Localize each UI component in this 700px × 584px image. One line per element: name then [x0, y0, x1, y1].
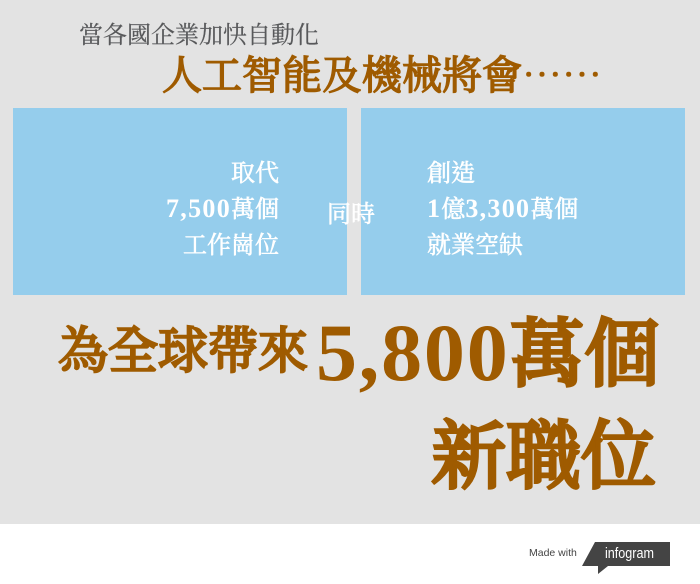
heading: 人工智能及機械將會…… — [162, 44, 602, 101]
intro text: 當各國企業加快自動化 — [79, 15, 319, 50]
footer: made with infogram — [529, 542, 670, 574]
text: at the same time: 同時 — [327, 194, 375, 229]
headline: 58 million: 5,800萬個 — [316, 295, 660, 402]
logo: infogram badge — [582, 542, 670, 574]
text: replaces 75 million jobs: 工作崗位 — [183, 225, 279, 260]
text: creates 133 million vacancies — [427, 153, 578, 260]
text: creates 133 million vacancies: 1億3,300萬個 — [427, 189, 578, 224]
text: replaces 75 million jobs: 取代 — [231, 153, 279, 188]
panel: left blue box — [13, 108, 347, 295]
footer label: Made with — [529, 547, 577, 559]
panel: right blue box — [361, 108, 685, 295]
text: creates 133 million vacancies: 就業空缺 — [427, 225, 523, 260]
headline: new jobs: 新職位 — [431, 397, 656, 504]
text: replaces 75 million jobs — [166, 153, 279, 260]
text: replaces 75 million jobs: 7,500萬個 — [166, 189, 279, 224]
text: creates 133 million vacancies: 創造 — [427, 153, 475, 188]
headline: brings to the world: 為全球帶來 — [58, 311, 308, 383]
logo: infogram badge: infogram — [605, 545, 654, 562]
